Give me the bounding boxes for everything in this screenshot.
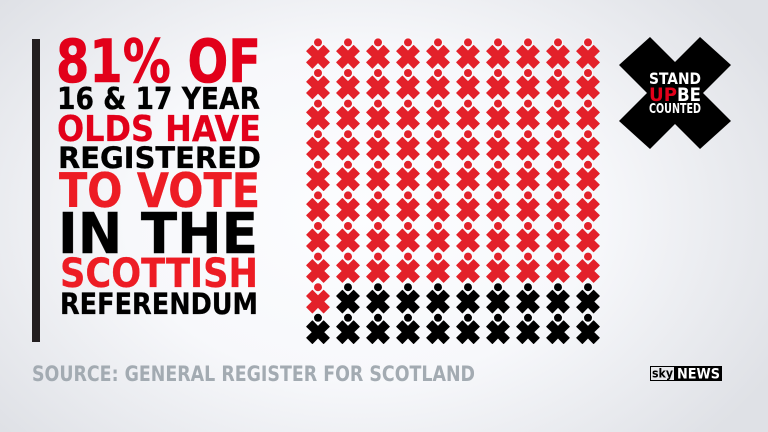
sky white panel xyxy=(651,367,674,380)
pictogram row 2: 10 red xyxy=(307,68,599,99)
logo text: counted: COUNTED xyxy=(649,102,701,117)
logo text: be: BE xyxy=(677,84,701,106)
source line: SOURCE: GENERAL REGISTER FOR SCOTLAND xyxy=(32,362,475,386)
pictogram row 8: 10 red xyxy=(307,252,599,282)
headline line: scottish: SCOTTISH xyxy=(60,251,258,297)
logo: Sky News xyxy=(650,366,722,382)
headline line: in the: IN THE xyxy=(58,202,258,267)
pictogram row 7: 10 red xyxy=(307,221,599,252)
logo text: up: UP xyxy=(649,84,677,106)
pictogram row 6: 10 red xyxy=(307,190,599,221)
headline line: registered: REGISTERED xyxy=(58,141,261,175)
headline line: 16 & 17 year: 16 & 17 YEAR xyxy=(57,82,260,117)
headline line: referendum: REFERENDUM xyxy=(60,287,258,321)
pictogram row 4: 10 red xyxy=(307,129,599,160)
pictogram row 1: 10 red xyxy=(307,37,599,68)
pictogram grid: 81 red and 19 black figures out of 100 xyxy=(307,37,599,344)
vertical accent bar xyxy=(32,39,40,342)
pictogram row 10: 10 black xyxy=(307,313,599,344)
pictogram row 5: 10 red xyxy=(307,160,599,190)
headline xyxy=(56,27,261,321)
sky wordmark: sky xyxy=(652,366,673,380)
logo black X xyxy=(619,37,731,149)
sky news black box xyxy=(650,366,722,381)
headline line: 81% of: 81% OF xyxy=(56,27,261,97)
logo text: stand: STAND xyxy=(649,69,701,88)
headline line: to vote: TO VOTE xyxy=(59,164,260,219)
pictogram row 9: 1 red, 9 black xyxy=(307,282,599,313)
logo: Stand Up Be Counted xyxy=(619,37,731,149)
pictogram row 3: 10 red xyxy=(307,99,599,129)
headline line: olds have: OLDS HAVE xyxy=(57,109,261,150)
news wordmark: NEWS xyxy=(677,366,720,382)
